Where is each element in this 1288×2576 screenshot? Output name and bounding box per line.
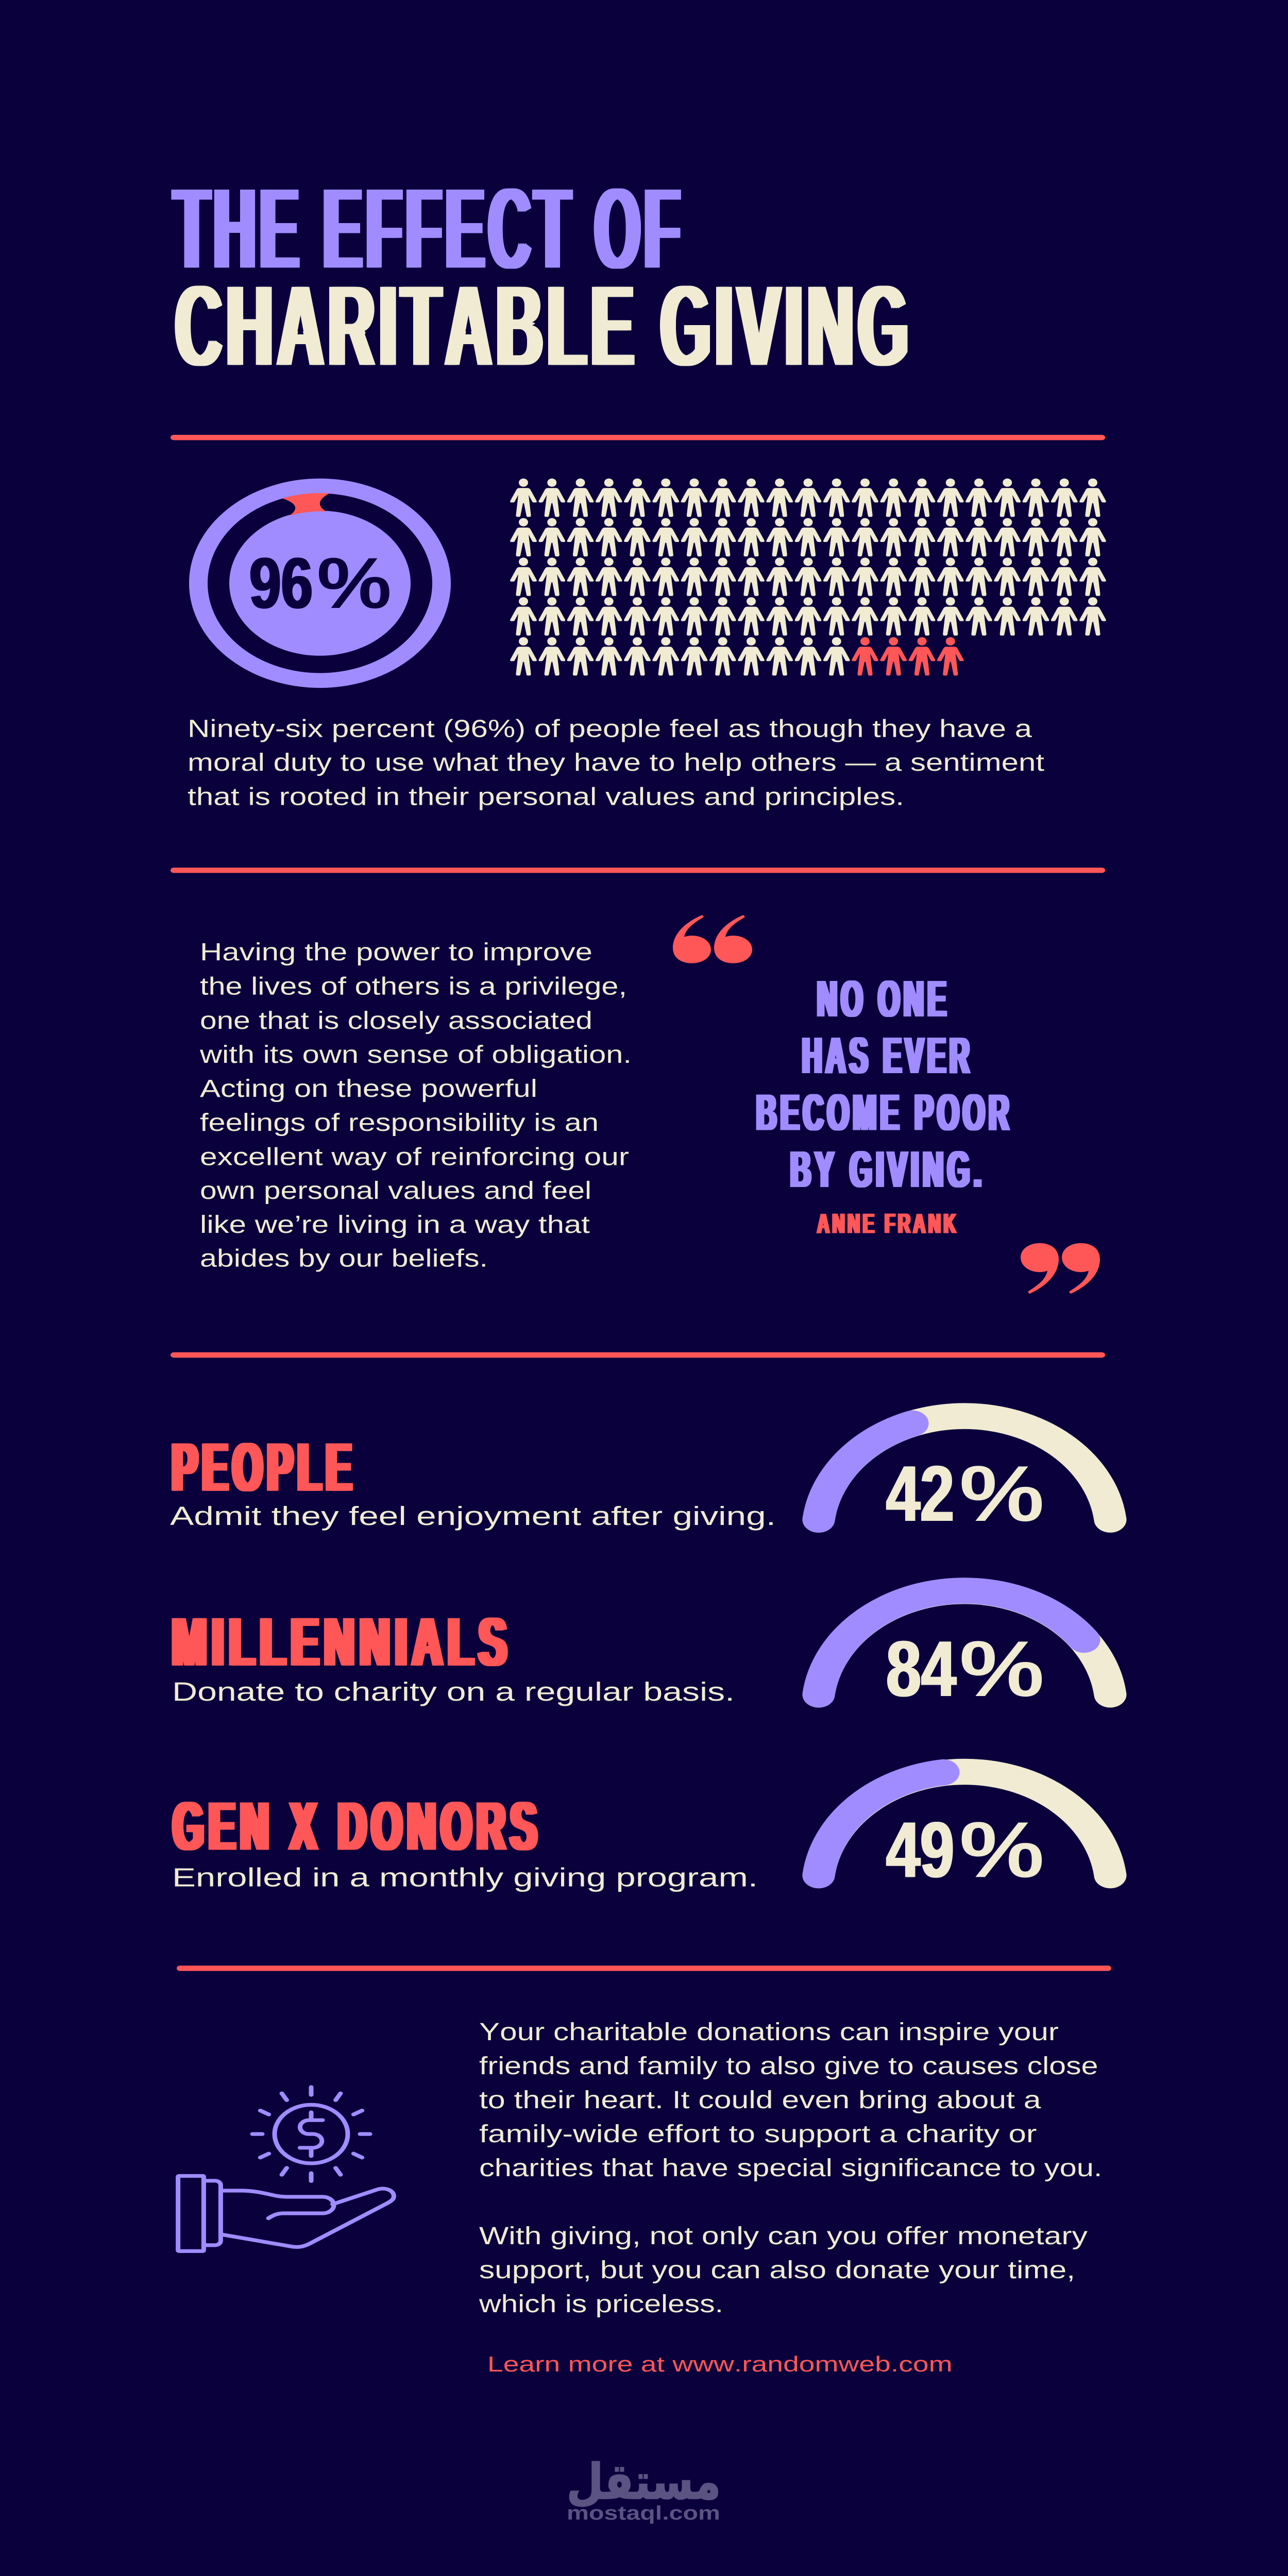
text block: inspire friends and family: With giving, not only can you offer monetary [479, 2222, 1088, 2250]
text block: moral duty [188, 715, 1044, 810]
text block: power to improve: Having the power to improve [200, 938, 592, 966]
donut value: % [317, 543, 392, 623]
stat: millennials [172, 1604, 735, 1706]
watermark logo: mostaql.com [567, 2502, 720, 2524]
quote [756, 970, 1013, 1198]
gauge: 84%: % [959, 1624, 1044, 1713]
link: Learn more at www.randomweb.com [487, 2352, 953, 2376]
donut value: 96 [249, 543, 313, 623]
text block: moral duty: moral duty to use what they have to help others — a sentiment [188, 749, 1044, 776]
stat: millennials: Donate to charity on a regular basis. [172, 1677, 735, 1706]
donut chart: 96% [198, 486, 442, 681]
stat: people: PEOPLE [172, 1429, 357, 1506]
pictogram: 100 people, 4 highlighted [510, 479, 1106, 675]
text block: power to improve: Acting on these powerful [200, 1075, 537, 1102]
text block: power to improve: like we’re living in a way that [200, 1211, 590, 1238]
gauge: 49%: 49 [886, 1805, 954, 1894]
text block: moral duty: Ninety-six percent (96%) of people feel as though they have a [188, 715, 1032, 742]
gauge: 42%: % [959, 1449, 1044, 1538]
text block: moral duty: that is rooted in their personal values and principles. [188, 783, 904, 810]
stat: people [170, 1429, 776, 1531]
text block: power to improve: abides by our beliefs. [200, 1244, 488, 1272]
quote: NO ONE [817, 970, 950, 1027]
gauge: 84%: 84 [886, 1624, 956, 1713]
icon: hand holding dollar coin [178, 2087, 394, 2251]
gauge: 84% [819, 1590, 1110, 1713]
stat: gen x donors [172, 1788, 758, 1892]
text block: power to improve: with its own sense of obligation. [199, 1041, 632, 1069]
gauge: 42%: 42 [886, 1449, 954, 1538]
text block: inspire friends and family: family-wide effort to support a charity or [479, 2120, 1037, 2148]
title [174, 163, 913, 392]
text block: power to improve: feelings of responsibility is an [200, 1109, 599, 1137]
stat: millennials: MILLENNIALS [172, 1604, 512, 1681]
stat: gen x donors: GEN X DONORS [173, 1788, 542, 1865]
text block: power to improve [199, 938, 632, 1272]
text block: power to improve: the lives of others is a privilege, [200, 972, 627, 1000]
text block: inspire friends and family: Your charitable donations can inspire your [479, 2018, 1059, 2046]
text block: inspire friends and family: friends and family to also give to causes close [479, 2052, 1098, 2080]
text block: inspire friends and family: charities that have special significance to you. [479, 2154, 1103, 2182]
gauge: 49% [819, 1772, 1110, 1894]
watermark logo [567, 2454, 721, 2524]
highlighted people [852, 637, 964, 675]
text: ANNE FRANK [817, 1208, 959, 1240]
quote: HAS EVER [802, 1027, 973, 1084]
text block: power to improve: one that is closely associated [200, 1007, 592, 1034]
stat: gen x donors: Enrolled in a monthly giving program. [172, 1863, 758, 1892]
text block: inspire friends and family: to their heart. It could even bring about a [479, 2086, 1041, 2114]
quote: BY GIVING. [790, 1141, 986, 1198]
text block: inspire friends and family: which is priceless. [479, 2290, 723, 2318]
text block: power to improve: excellent way of reinforcing our [200, 1143, 629, 1171]
text block: power to improve: own personal values and feel [200, 1177, 591, 1205]
text block: inspire friends and family [479, 2018, 1103, 2318]
icon: closing quotation mark [1021, 1243, 1100, 1294]
text block: inspire friends and family: support, but you can also donate your time, [479, 2256, 1075, 2284]
icon: opening quotation mark [673, 915, 752, 963]
gauge: 49%: % [959, 1805, 1044, 1894]
watermark logo: مستقل [567, 2454, 721, 2511]
stat: people: Admit they feel enjoyment after giving. [170, 1502, 776, 1531]
gauge: 42% [819, 1416, 1110, 1538]
donut red segment [282, 493, 329, 516]
